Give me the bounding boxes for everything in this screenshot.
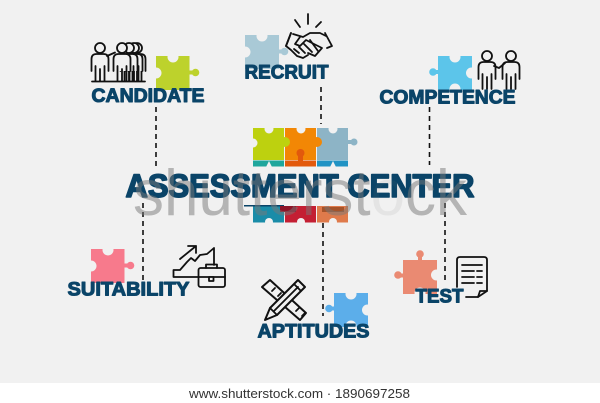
footer strip — [0, 383, 600, 403]
icon: group of candidates — [92, 43, 146, 82]
top row orange piece — [280, 124, 316, 166]
icon: growth chart and briefcase — [174, 246, 225, 287]
top row blue-grey piece — [312, 124, 358, 166]
central puzzle: top row — [248, 124, 358, 167]
puzzle piece: aptitudes — [325, 288, 373, 332]
icon: handshake — [286, 14, 332, 58]
bottom row red piece — [285, 206, 316, 222]
title: ASSESSMENT CENTER — [126, 168, 474, 204]
bottom row orange piece — [317, 206, 348, 222]
label: recruit: RECRUIT — [244, 62, 329, 84]
watermark: shutterstock — [133, 156, 467, 229]
bottom row teal piece — [253, 206, 284, 222]
central puzzle: bottom row — [244, 205, 348, 226]
puzzle piece: competence — [429, 52, 477, 94]
top row green piece — [248, 124, 284, 166]
icon: pencil and ruler — [262, 280, 306, 320]
icon: two people shaking hands — [478, 51, 520, 89]
label: competence: COMPETENCE — [380, 86, 516, 108]
dashed connectors — [143, 87, 445, 316]
label: suitability: SUITABILITY — [68, 278, 190, 300]
label: test: TEST — [416, 286, 464, 308]
puzzle piece: test — [394, 250, 442, 298]
footer credit: www.shutterstock.com · 1890697258 — [188, 386, 410, 401]
puzzle piece: recruit — [240, 30, 288, 69]
label: candidate: CANDIDATE — [92, 85, 204, 107]
label: aptitudes: APTITUDES — [258, 320, 370, 342]
puzzle piece: suitability — [86, 244, 134, 283]
puzzle piece: candidate — [150, 52, 199, 90]
icon: test document — [457, 257, 487, 297]
